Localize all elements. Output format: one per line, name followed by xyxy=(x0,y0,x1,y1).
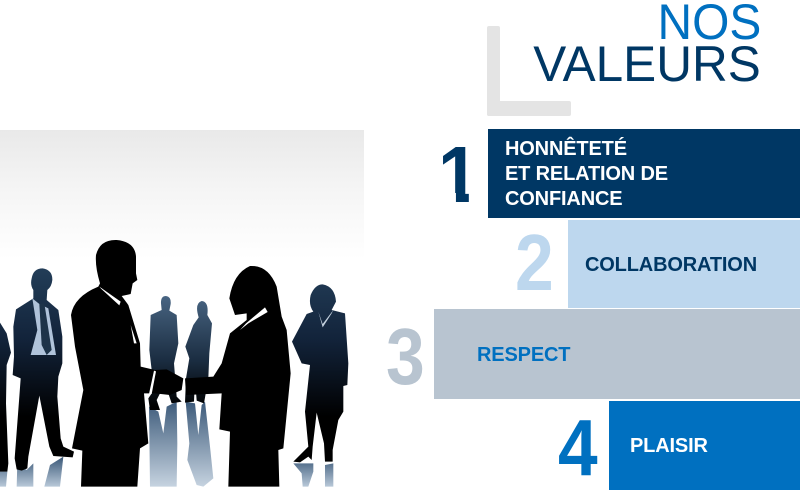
label 1: HONNÊTETÉ xyxy=(505,138,627,160)
number 4: 4 xyxy=(558,403,597,492)
title: VALEURS xyxy=(534,36,761,92)
label 2: COLLABORATION xyxy=(585,254,757,276)
person: man shaking hands xyxy=(71,240,183,487)
label 1: CONFIANCE xyxy=(505,188,622,210)
number 1: 1 xyxy=(438,130,479,219)
value 4 xyxy=(558,401,800,492)
label 3: RESPECT xyxy=(477,344,570,366)
label 4: PLAISIR xyxy=(630,435,708,457)
number 2: 2 xyxy=(515,218,553,307)
bar 1 xyxy=(488,129,800,218)
decorative L shape xyxy=(487,26,571,116)
illustration: business people silhouettes xyxy=(0,130,364,487)
label 1: ET RELATION DE xyxy=(505,163,668,185)
person: man with tie xyxy=(13,268,74,471)
value 2 xyxy=(515,218,800,308)
reflections xyxy=(0,402,333,487)
value 1 xyxy=(443,129,800,218)
label 1 xyxy=(505,136,668,210)
bar 2 xyxy=(568,220,800,308)
person: background man xyxy=(148,296,182,410)
person: far left xyxy=(0,323,11,472)
bar 4 xyxy=(609,401,800,490)
bar 3 xyxy=(434,309,800,399)
person: background woman xyxy=(185,301,212,403)
person: woman on right xyxy=(292,284,348,462)
person: woman shaking hands xyxy=(185,266,291,487)
title xyxy=(534,0,761,92)
number 3: 3 xyxy=(386,312,425,401)
value 3 xyxy=(386,309,800,401)
